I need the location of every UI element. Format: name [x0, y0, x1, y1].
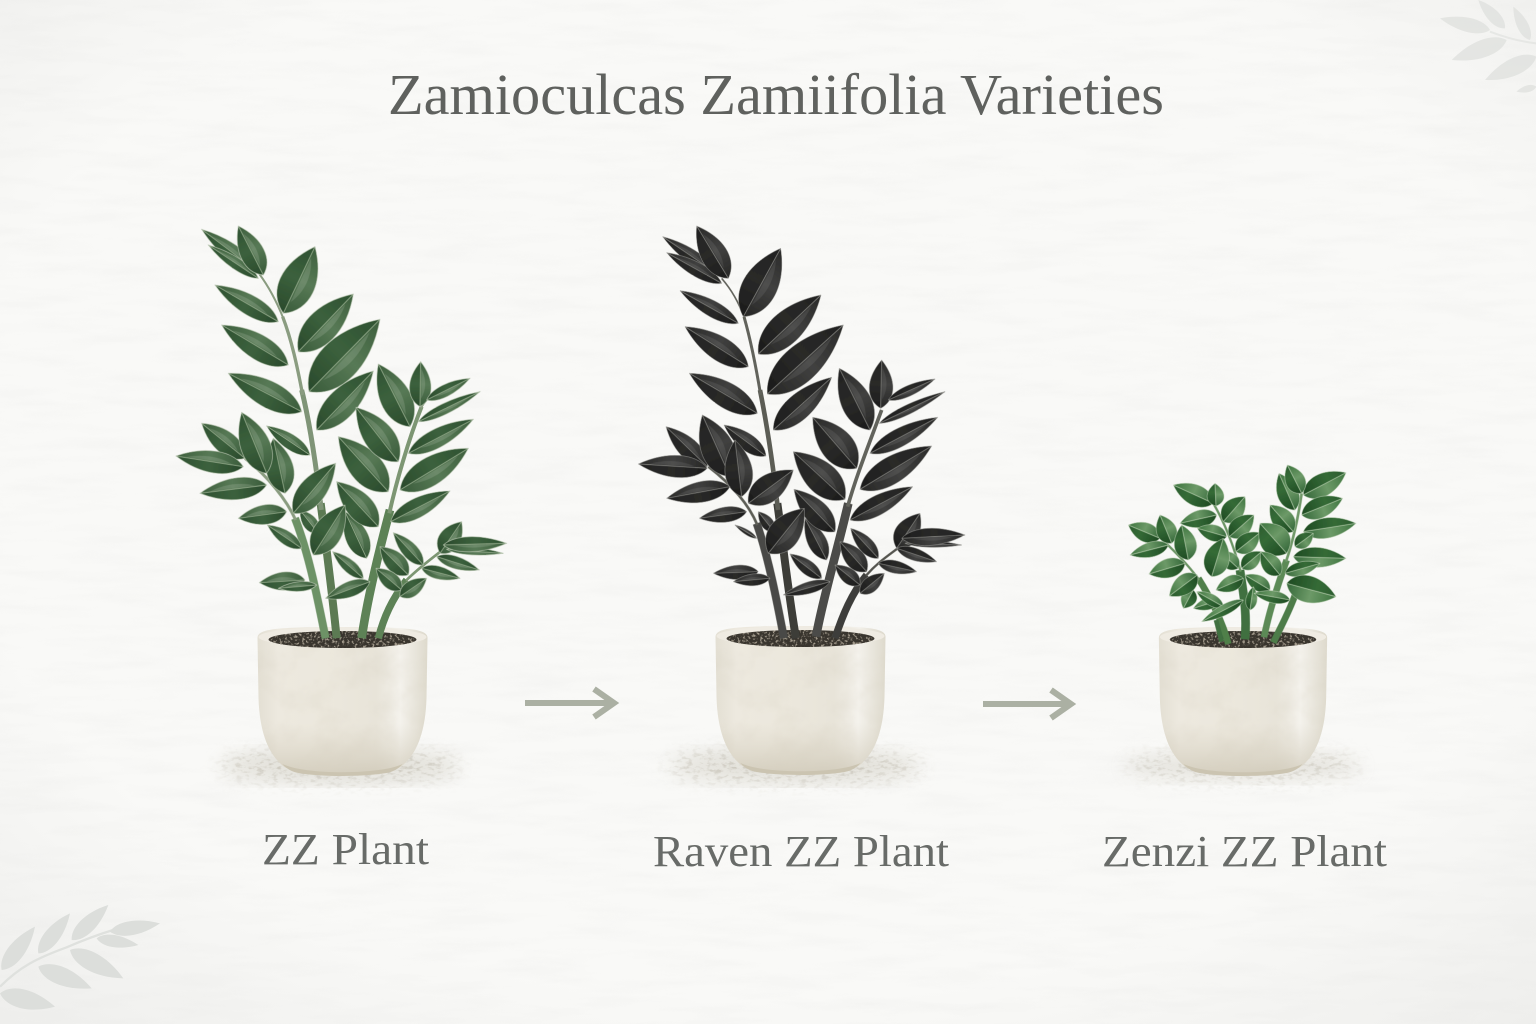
pot: Raven [716, 626, 886, 775]
variety: ZZ Plant [174, 221, 507, 874]
decorative leaf sprig: top right [1438, 0, 1536, 95]
pot shadow: Raven [665, 748, 925, 784]
pot: ZZ Plant [258, 627, 428, 776]
pot: Zenzi [1159, 627, 1327, 776]
variety: Zenzi ZZ Plant [1102, 461, 1387, 876]
decorative leaf sprig: bottom left [0, 899, 161, 1016]
plant: Zenzi [1125, 461, 1358, 644]
pot shadow: Zenzi [1125, 750, 1361, 782]
arrow: ZZ Plant to Raven [525, 689, 614, 717]
title: Zamioculcas Zamiifolia Varieties [388, 62, 1164, 127]
pot shadow: ZZ Plant [218, 748, 462, 784]
label: Raven ZZ Plant: Raven ZZ Plant [653, 827, 949, 876]
variety: Raven ZZ Plant [638, 219, 966, 876]
plant: Raven [638, 219, 966, 638]
arrow: Raven to Zenzi [983, 690, 1071, 718]
label: Zenzi ZZ Plant: Zenzi ZZ Plant [1102, 827, 1387, 876]
plant: ZZ Plant [174, 221, 507, 638]
label: ZZ Plant: ZZ Plant [262, 825, 429, 874]
